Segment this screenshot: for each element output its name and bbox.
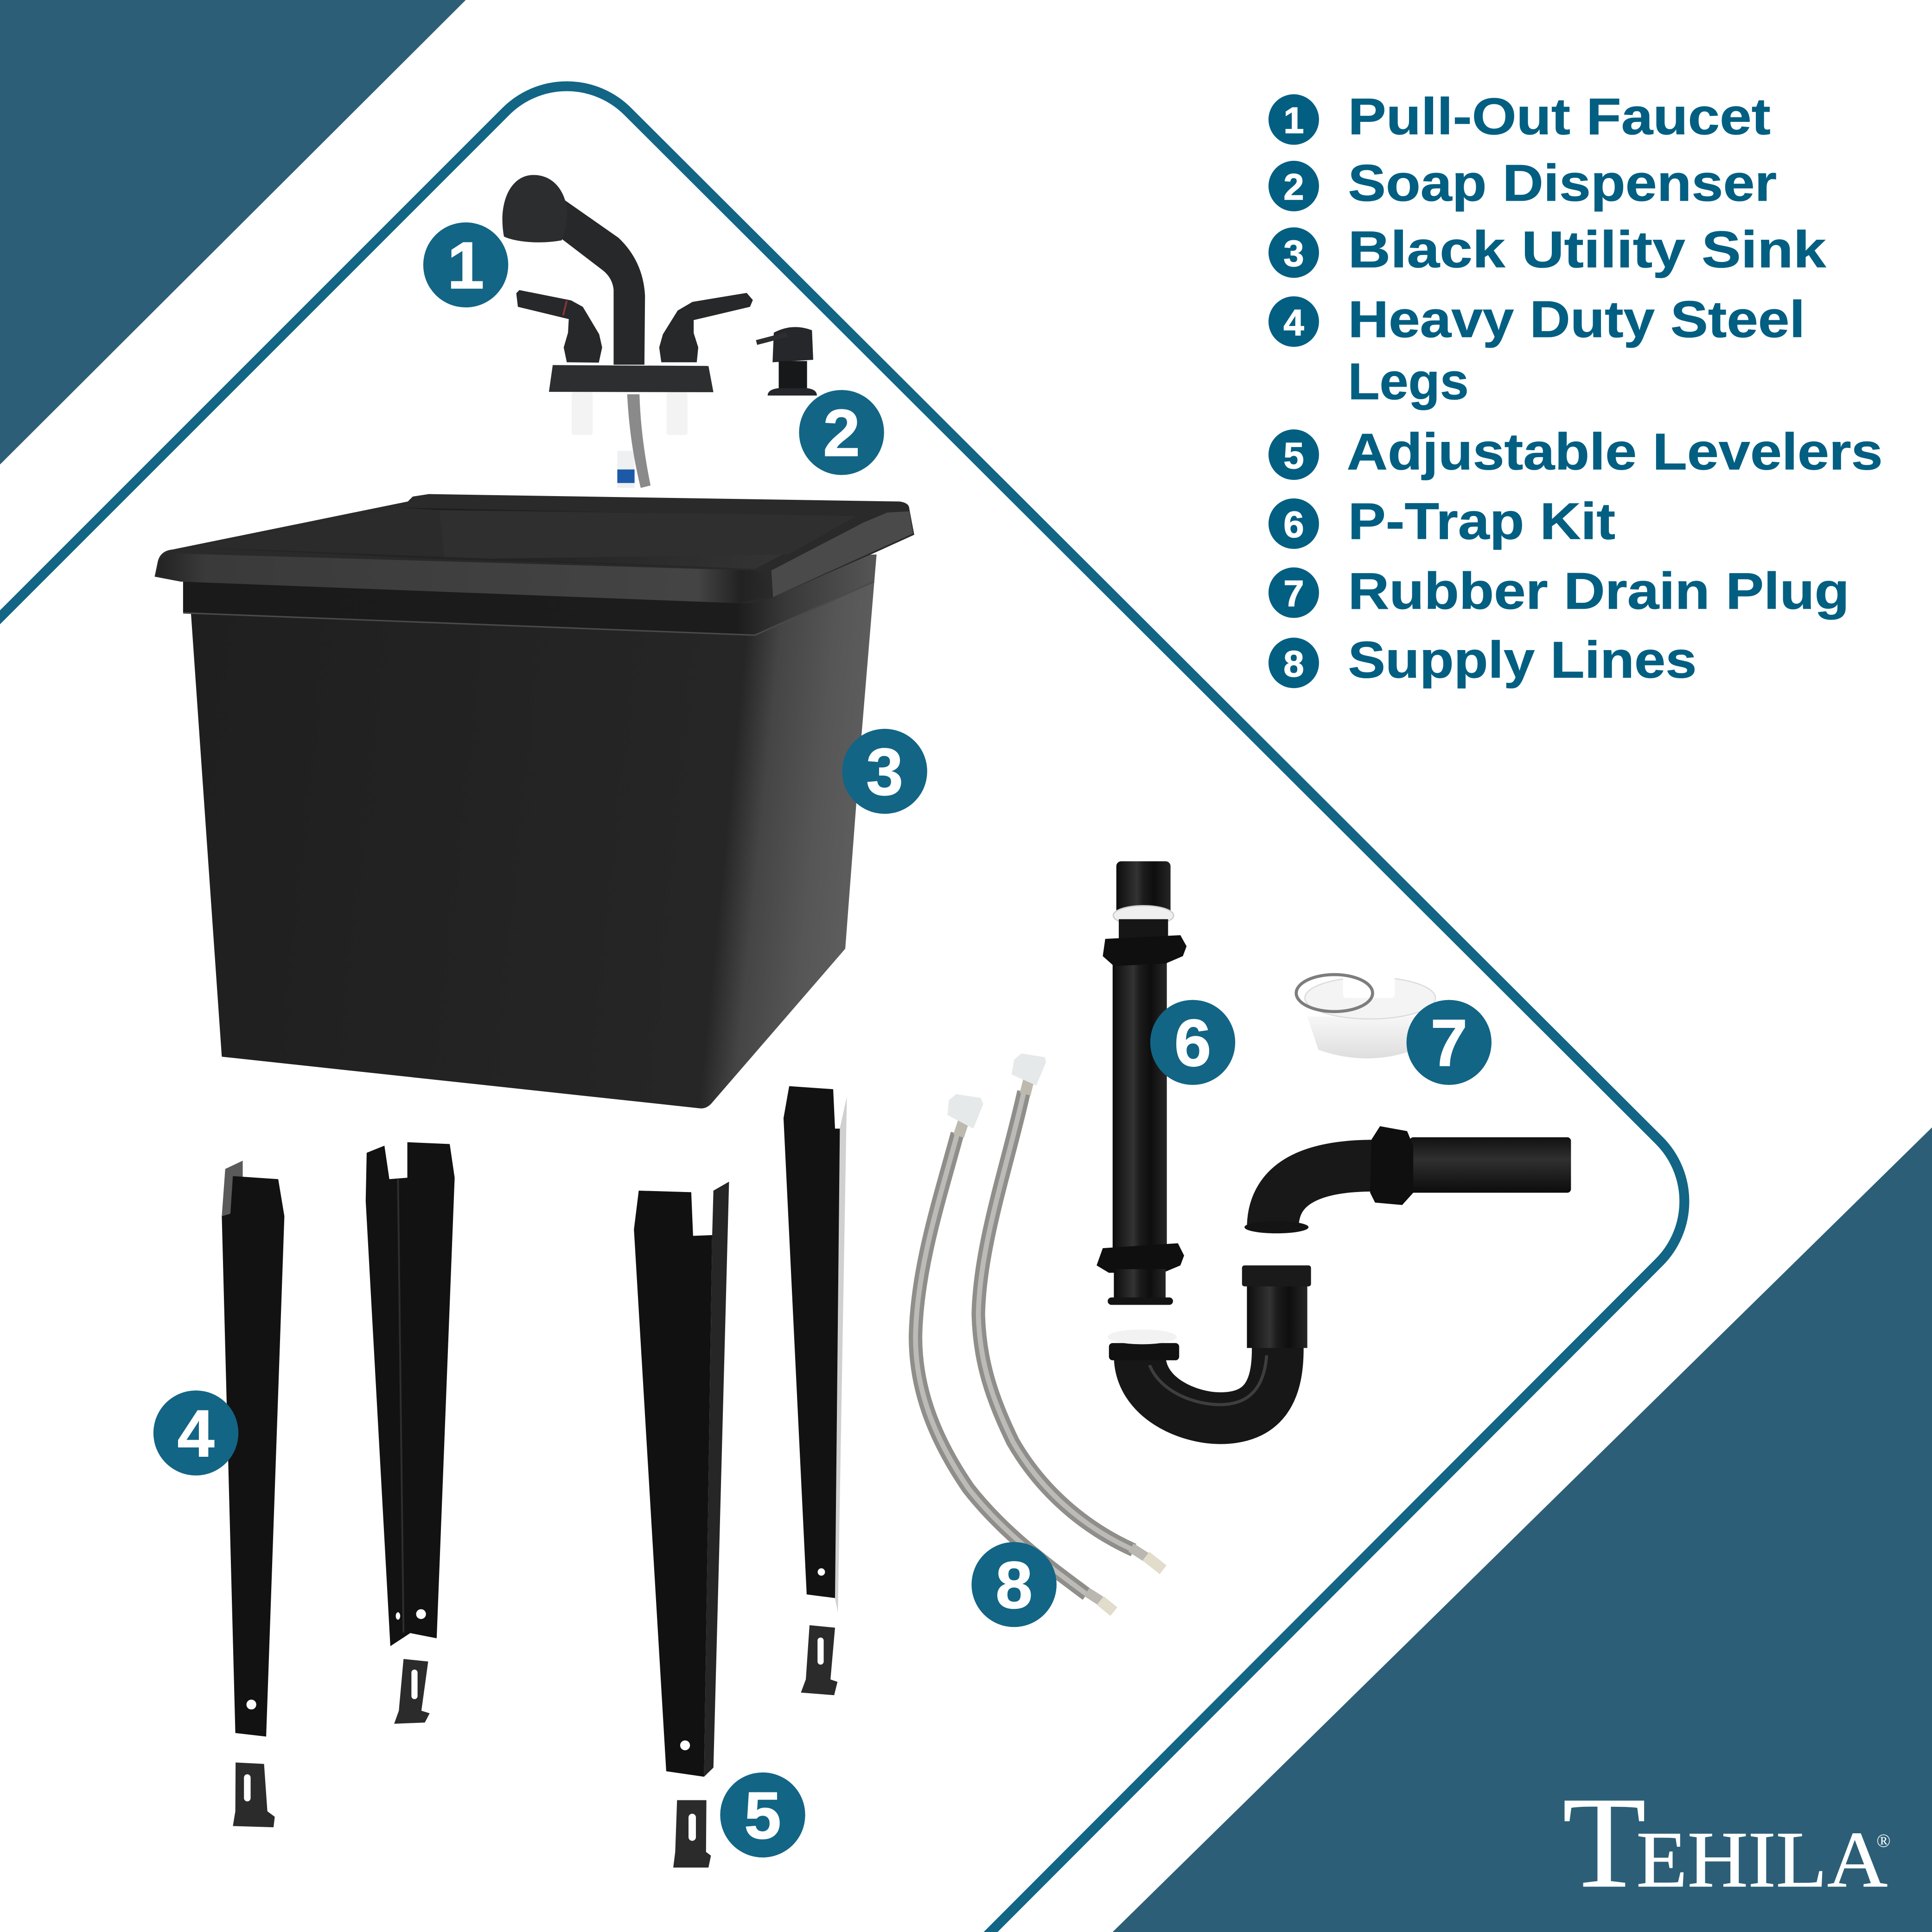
sink rim [155, 494, 914, 603]
legend item 2: Soap Dispenser [1348, 154, 1777, 212]
badge 4: 4 [178, 1396, 215, 1471]
leveler B [394, 1659, 430, 1724]
badge 3: 3 [866, 735, 903, 809]
supply line right [978, 1053, 1163, 1570]
leg C [634, 1182, 729, 1777]
faucet [503, 175, 753, 488]
badge 5 [720, 1773, 805, 1857]
badge 3 [842, 729, 927, 814]
legend item 1: 1 [1283, 100, 1304, 141]
legend item 5: Adjustable Levelers [1347, 423, 1883, 481]
steel legs [222, 1086, 847, 1777]
legend item 7: 7 [1283, 573, 1304, 614]
legend item 4 [1269, 290, 1805, 410]
supply line left [916, 1094, 1114, 1612]
leveler C [673, 1800, 711, 1868]
rubber drain plug [1296, 973, 1435, 1058]
leveler D [801, 1625, 837, 1695]
tailpiece [1097, 861, 1186, 1305]
badge 7: 7 [1430, 1006, 1467, 1080]
corner triangle: top left [0, 0, 466, 465]
sink [155, 494, 914, 1109]
badge 2 [799, 390, 884, 475]
badge 7 [1407, 1000, 1492, 1085]
legend item 1: Pull-Out Faucet [1348, 88, 1771, 146]
faucet white posts [572, 392, 688, 435]
legend item 3: Black Utility Sink [1348, 221, 1827, 279]
badge 1: 1 [447, 229, 484, 303]
sink rim right band [772, 511, 913, 597]
legend list [1269, 88, 1883, 689]
sink upper band [183, 555, 877, 635]
logo: Tehila [1562, 1770, 1891, 1915]
badge 8: 8 [995, 1548, 1033, 1622]
adjustable levelers [233, 1625, 837, 1868]
faucet left handle [516, 290, 602, 363]
supply lines [916, 1053, 1163, 1612]
badge 5: 5 [744, 1779, 781, 1853]
faucet head [503, 175, 567, 242]
legend item 4: Heavy Duty Steel [1348, 290, 1805, 348]
logo: Tehila: ® [1876, 1830, 1891, 1851]
faucet red ring [563, 300, 567, 315]
faucet base [549, 365, 714, 392]
legend item 6: 6 [1283, 504, 1304, 545]
legend item 8: 8 [1283, 643, 1304, 684]
trap u-bend [1108, 1265, 1311, 1418]
legend item 3: 3 [1283, 233, 1304, 274]
faucet neck [557, 195, 645, 365]
badge 1 [423, 223, 508, 307]
leveler A [233, 1762, 275, 1827]
leg B [366, 1142, 455, 1646]
badge 4 [153, 1390, 238, 1475]
badge 6: 6 [1174, 1006, 1211, 1080]
legend item 8: Supply Lines [1348, 631, 1696, 689]
faucet tag [617, 451, 635, 488]
sink basin interior [191, 508, 856, 569]
legend item 7: Rubber Drain Plug [1348, 562, 1849, 620]
corner triangle: bottom right [1113, 1128, 1932, 1932]
leg A [222, 1160, 284, 1737]
p-trap kit [1097, 861, 1571, 1418]
faucet hose [627, 394, 650, 488]
sink ledge line [183, 581, 874, 635]
legend item 4: Legs [1348, 352, 1469, 410]
legend item 4: 4 [1283, 302, 1304, 343]
logo: Tehila: T [1562, 1770, 1646, 1915]
badge 8 [971, 1542, 1057, 1627]
numbered callouts on the photo [153, 223, 1492, 1857]
elbow [1244, 1126, 1571, 1233]
legend item 5: 5 [1283, 435, 1304, 476]
badge 2: 2 [823, 396, 860, 470]
logo: Tehila: EHILA [1636, 1816, 1887, 1904]
legend item 2: 2 [1283, 166, 1304, 208]
faucet right handle [659, 293, 753, 362]
leg D [784, 1086, 847, 1613]
badge 6 [1150, 1000, 1235, 1085]
legend item 6: P-Trap Kit [1348, 492, 1615, 550]
soap dispenser [757, 327, 817, 395]
sink body [183, 555, 877, 1109]
sink rim front band [157, 553, 772, 603]
